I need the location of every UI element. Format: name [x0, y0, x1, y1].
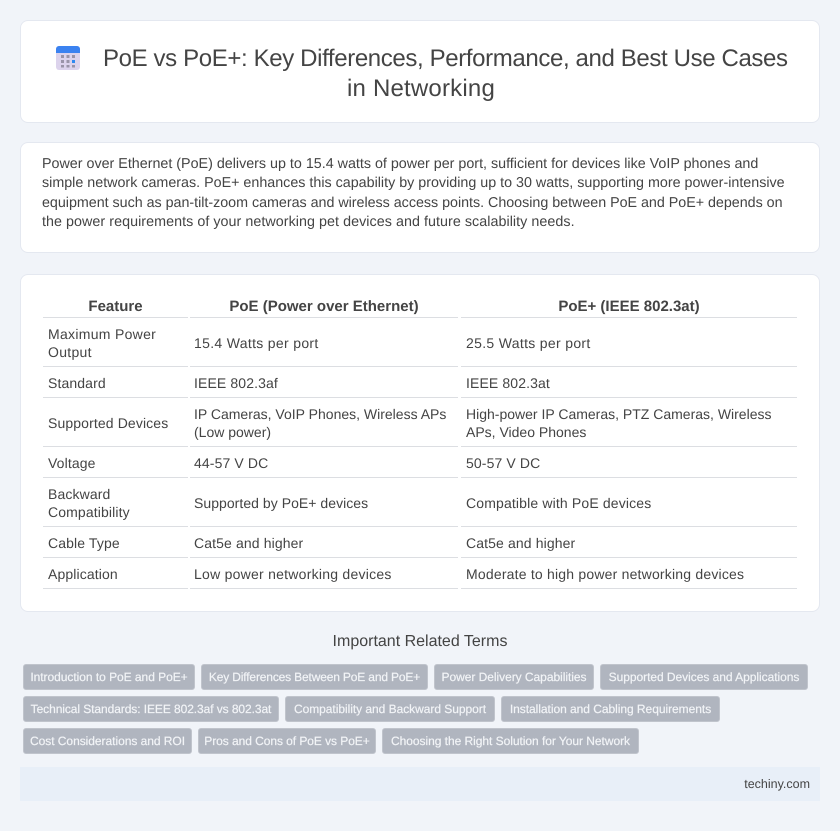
- cell: (Low power): [194, 424, 271, 440]
- footer: [20, 767, 820, 801]
- cell: Compatible with PoE devices: [466, 495, 651, 511]
- tag: [198, 728, 376, 754]
- row: Maximum Power Output: Maximum Power: [48, 326, 156, 342]
- cell: 44-57 V DC: [194, 455, 268, 471]
- cell: [466, 406, 771, 440]
- row: Voltage: Voltage: [48, 455, 96, 471]
- tag: [434, 664, 594, 690]
- tag: Key Differences Between PoE and PoE+: [209, 670, 420, 684]
- heading: Important Related Terms: Important Related Terms: [333, 633, 507, 650]
- cell: 50-57 V DC: [466, 455, 540, 471]
- title: PoE vs PoE+: Key Differences, Performance, and Best Use Cases: [103, 45, 788, 72]
- cell: Cat5e and higher: [466, 535, 575, 551]
- row: Backward Compatibility: Compatibility: [48, 504, 130, 520]
- cell: 25.5 Watts per port: [466, 335, 591, 351]
- cell: Supported by PoE+ devices: [194, 495, 368, 511]
- panel: title card: [20, 20, 820, 123]
- row: Supported Devices: Supported Devices: [48, 415, 168, 431]
- cell: Low power networking devices: [194, 566, 392, 582]
- tag: Power Delivery Capabilities: [442, 670, 586, 684]
- row: Standard: Standard: [48, 375, 106, 391]
- tag: [501, 696, 720, 722]
- row: Maximum Power Output: Output: [48, 344, 92, 360]
- title: in Networking: [347, 75, 495, 102]
- row: Cable Type: Cable Type: [48, 535, 120, 551]
- tag: Supported Devices and Applications: [609, 670, 799, 684]
- cell: APs, Video Phones: [466, 424, 586, 440]
- cell: Moderate to high power networking devices: [466, 566, 744, 582]
- tag: Pros and Cons of PoE vs PoE+: [204, 734, 370, 748]
- tag: [285, 696, 495, 722]
- row: Backward Compatibility: Backward: [48, 486, 110, 502]
- tag: Compatibility and Backward Support: [294, 702, 486, 716]
- table header: Feature: Feature: [88, 298, 143, 315]
- cell: IEEE 802.3at: [466, 375, 550, 391]
- cell: [194, 406, 446, 440]
- row: Maximum Power Output: [48, 326, 156, 360]
- tag: [382, 728, 639, 754]
- table header: PoE+: PoE+ (IEEE 802.3at): [558, 298, 700, 315]
- cell: IP Cameras, VoIP Phones, Wireless APs: [194, 406, 446, 422]
- tag: [23, 696, 279, 722]
- tag: Choosing the Right Solution for Your Network: [391, 734, 630, 748]
- text block: introduction: the power requirements of your networking pet devices and future scalability needs.: [42, 214, 575, 230]
- tag: Cost Considerations and ROI: [30, 734, 185, 748]
- cell: 15.4 Watts per port: [194, 335, 319, 351]
- text block: introduction: [42, 156, 785, 230]
- title: [103, 45, 788, 102]
- text block: introduction: simple network cameras. PoE+ enhances this capability by providing up to 30 watts, supporting more power-intensive: [42, 175, 785, 191]
- cell: High-power IP Cameras, PTZ Cameras, Wireless: [466, 406, 771, 422]
- tag: [23, 664, 195, 690]
- tag: Technical Standards: IEEE 802.3af vs 802.3at: [31, 702, 271, 716]
- tag: [201, 664, 428, 690]
- text block: introduction: Power over Ethernet (PoE) delivers up to 15.4 watts of power per port, sufficient for devices like VoIP phones and: [42, 156, 758, 172]
- cell: Cat5e and higher: [194, 535, 303, 551]
- panel: introduction: [20, 142, 820, 253]
- table header: PoE: PoE (Power over Ethernet): [229, 298, 419, 315]
- panel: comparison table: [20, 274, 820, 612]
- row: Application: Application: [48, 566, 118, 582]
- cell: IEEE 802.3af: [194, 375, 278, 391]
- tag: [23, 728, 192, 754]
- footer text: techiny.com: [744, 777, 810, 791]
- tag: [600, 664, 808, 690]
- icon: calendar grid: [56, 46, 80, 70]
- row: Backward Compatibility: [48, 486, 130, 520]
- tag: Introduction to PoE and PoE+: [30, 670, 188, 684]
- text block: introduction: equipment such as pan-tilt-zoom cameras and wireless access points. Choosing between PoE and PoE+ depends on: [42, 194, 783, 210]
- tag: Installation and Cabling Requirements: [510, 702, 711, 716]
